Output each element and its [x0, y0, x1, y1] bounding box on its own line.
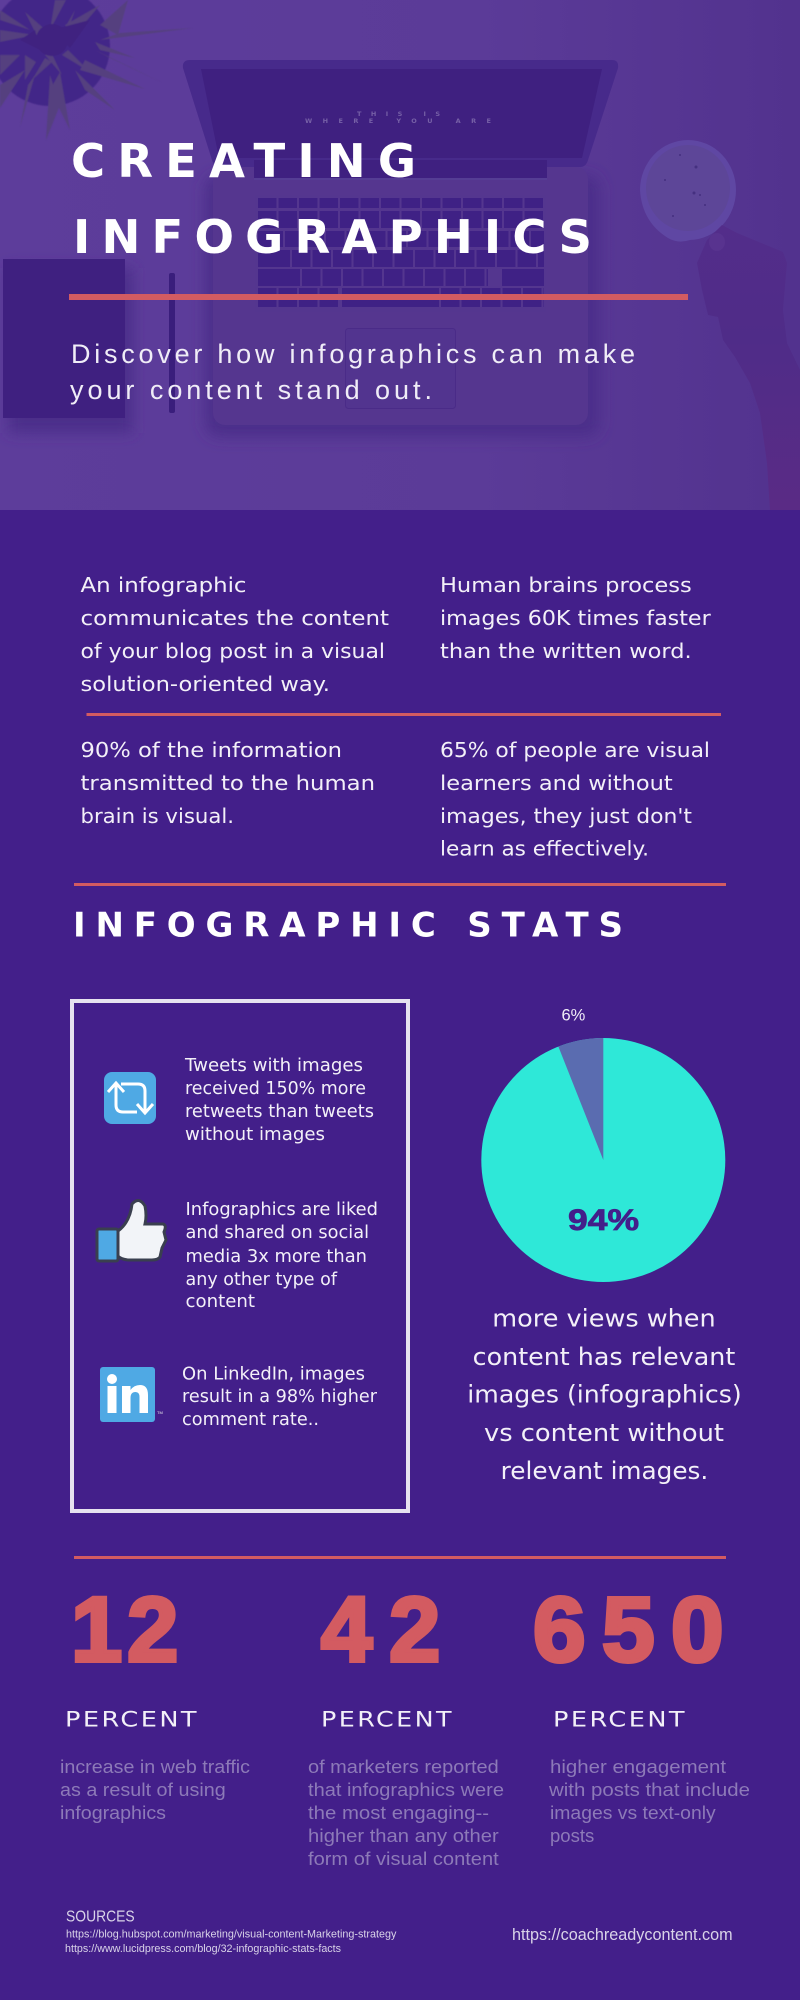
- heading: infographic stats: INFOGRAPHIC STATS: [73, 906, 631, 946]
- text block: information is visual: transmitted to the human: [80, 771, 375, 795]
- stat: 42 percent: of marketers reported: [308, 1756, 499, 1777]
- stat: 650 percent: 650: [533, 1579, 740, 1681]
- hero photo: desk with laptop: [0, 0, 800, 510]
- title divider: [69, 294, 688, 300]
- title: CREATING: [71, 134, 429, 188]
- text: infographics are liked: [186, 1200, 378, 1312]
- stat: 42 percent: that infographics were: [308, 1779, 504, 1800]
- text: linkedin comment rate: result in a 98% higher: [182, 1387, 378, 1407]
- title: INFOGRAPHICS: [73, 210, 603, 264]
- sources: https://blog.hubspot.com/marketing/visual-content-Marketing-strategy: [66, 1928, 397, 1940]
- text block: brains process images: [440, 573, 711, 663]
- icon: linkedin: [100, 1367, 163, 1422]
- text block: pie caption: relevant images.: [501, 1457, 708, 1485]
- text block: visual learners: images, they just don't: [440, 804, 692, 828]
- laptop keyboard: [255, 195, 546, 312]
- text block: what an infographic is: communicates the content: [80, 606, 389, 630]
- text: infographics are liked: and shared on social: [186, 1223, 369, 1243]
- stat: 42 percent: [308, 1579, 504, 1869]
- text block: visual learners: learn as effectively.: [440, 836, 649, 860]
- sources: https://www.lucidpress.com/blog/32-infographic-stats-facts: [65, 1943, 341, 1955]
- text block: visual learners: [440, 738, 710, 860]
- panel: social media stats: [72, 1001, 408, 1511]
- stat: 42 percent: PERCENT: [321, 1708, 454, 1732]
- text block: what an infographic is: solution-oriented way.: [80, 672, 330, 696]
- subtitle: your content stand out.: [70, 375, 435, 405]
- stat: 12 percent: 12: [71, 1579, 183, 1681]
- stat: 650 percent: higher engagement: [550, 1756, 726, 1777]
- text block: brains process images: images 60K times faster: [440, 606, 711, 630]
- stat: 650 percent: [533, 1579, 750, 1846]
- icon: linkedin: TM: [157, 1410, 163, 1415]
- label: 6%: 6%: [562, 1006, 586, 1024]
- stat: 650 percent: PERCENT: [553, 1708, 687, 1732]
- pie chart: [481, 1006, 725, 1282]
- stat: 12 percent: PERCENT: [65, 1708, 199, 1732]
- text: infographics are liked: media 3x more than: [186, 1247, 367, 1267]
- text block: pie caption: more views when: [492, 1305, 716, 1333]
- icon: retweet: [104, 1072, 156, 1124]
- laptop base: [213, 167, 588, 425]
- text: linkedin comment rate: On LinkedIn, images: [182, 1364, 365, 1384]
- text block: pie caption: vs content without: [484, 1419, 724, 1447]
- text: tweets with images: without images: [185, 1125, 325, 1145]
- text: tweets with images: retweets than tweets: [185, 1102, 374, 1122]
- pen: [169, 273, 175, 413]
- text block: what an infographic is: An infographic: [80, 573, 246, 597]
- icon: thumbs up: [97, 1200, 166, 1261]
- sources: SOURCES: [66, 1908, 135, 1926]
- divider: [86, 713, 721, 716]
- text: linkedin comment rate: comment rate..: [182, 1410, 319, 1430]
- title: [71, 134, 603, 264]
- text block: information is visual: [80, 738, 375, 828]
- stat: 12 percent: increase in web traffic: [60, 1756, 250, 1777]
- divider: [74, 1556, 726, 1559]
- stat: 12 percent: [60, 1579, 250, 1823]
- text block: pie caption: images (infographics): [467, 1381, 742, 1409]
- stat: 12 percent: as a result of using: [60, 1779, 226, 1800]
- coffee cup: [640, 140, 736, 242]
- label: 94%: 94%: [568, 1204, 639, 1237]
- text: infographics are liked: content: [186, 1292, 255, 1312]
- text block: information is visual: brain is visual.: [80, 804, 234, 828]
- stat: 650 percent: images vs text-only: [550, 1802, 716, 1823]
- text: tweets with images: received 150% more: [185, 1079, 366, 1099]
- text: tweets with images: [184, 1056, 374, 1145]
- text block: brains process images: than the written word.: [440, 639, 692, 663]
- subtitle: Discover how infographics can make: [71, 339, 638, 369]
- laptop trackpad: [346, 328, 456, 408]
- text block: pie caption: [467, 1305, 742, 1485]
- stat: 42 percent: 42: [321, 1579, 457, 1681]
- notebook: [3, 259, 133, 433]
- stat: 650 percent: with posts that include: [548, 1779, 750, 1800]
- text block: brains process images: Human brains process: [440, 573, 692, 597]
- screen text: [305, 110, 499, 125]
- pie slice: 6%: [558, 1038, 603, 1160]
- screen text: THIS IS: [357, 110, 448, 118]
- hand: [697, 225, 800, 510]
- text block: pie caption: content has relevant: [473, 1343, 735, 1371]
- stat: 650 percent: posts: [550, 1825, 594, 1846]
- text block: visual learners: learners and without: [440, 771, 673, 795]
- text: infographics are liked: any other type of: [186, 1270, 338, 1290]
- text block: what an infographic is: of your blog post in a visual: [80, 639, 385, 663]
- divider: [74, 883, 726, 886]
- text: tweets with images: Tweets with images: [184, 1056, 363, 1076]
- screen text: WHERE YOU ARE: [305, 117, 499, 125]
- text block: visual learners: 65% of people are visual: [440, 738, 710, 762]
- laptop shadow: [205, 175, 600, 437]
- text: infographics are liked: Infographics are liked: [186, 1200, 378, 1220]
- stat: 42 percent: higher than any other: [308, 1825, 499, 1846]
- stat: 12 percent: infographics: [60, 1802, 166, 1823]
- sources: [65, 1908, 397, 1955]
- text block: what an infographic is: [80, 573, 389, 696]
- text block: information is visual: 90% of the information: [80, 738, 342, 762]
- stat: 42 percent: the most engaging--: [308, 1802, 489, 1823]
- laptop lid: [183, 60, 618, 180]
- stat: 42 percent: form of visual content: [308, 1848, 499, 1869]
- subtitle: [70, 339, 638, 405]
- website url: https://coachreadycontent.com: [512, 1926, 733, 1944]
- icon: plant: [0, 0, 193, 140]
- text: linkedin comment rate: [182, 1364, 378, 1430]
